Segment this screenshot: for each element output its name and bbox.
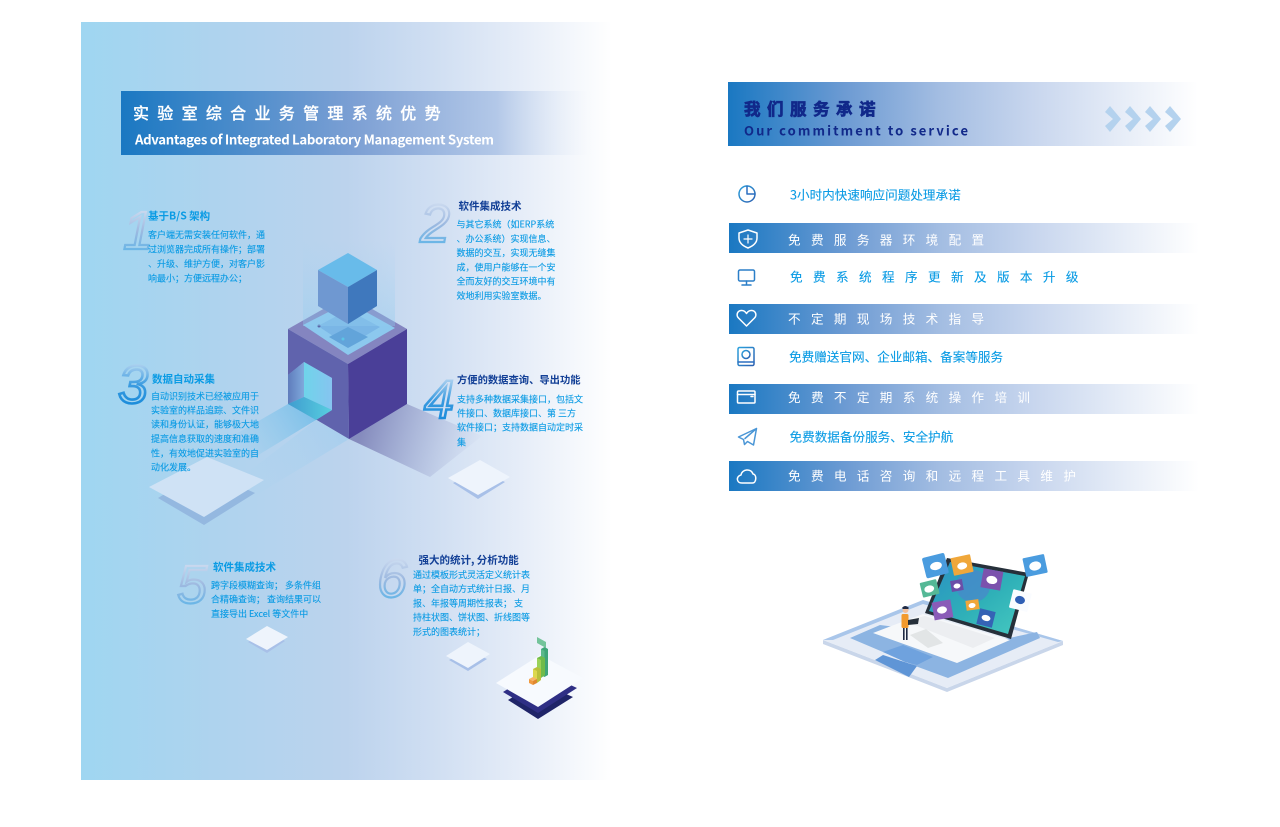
row: response commitment: 3小时内快速响应问题处理承诺 <box>790 184 961 204</box>
feature 4: 方便的数据查询、导出功能 <box>457 372 581 386</box>
platform: left large <box>149 457 264 525</box>
feature 1: 过浏览器完成所有操作；部署 <box>148 242 265 256</box>
feature 4: 软件接口；支持数据自动定时采 <box>457 420 583 434</box>
feature 1: 1 <box>123 201 153 261</box>
icon: clock <box>739 186 755 202</box>
feature 5: 合精确查询； 查询结果可以 <box>211 592 321 606</box>
commitment heading banner: Our commitment to service <box>744 120 968 140</box>
cloud app tiles <box>920 553 1048 628</box>
feature 3: 数据自动采集 <box>152 372 215 386</box>
feature 3: 自动识别技术已经被应用于 <box>151 390 259 402</box>
row: on-site guidance <box>729 304 1199 334</box>
isometric base <box>823 600 1063 692</box>
feature 1 <box>123 201 265 284</box>
commitment heading banner <box>728 82 1198 146</box>
icon: book <box>738 348 754 366</box>
platform: feature 6 <box>446 642 490 671</box>
feature 2: 与其它系统（如ERP系统 <box>456 218 554 230</box>
feature 3: 3 <box>118 355 148 415</box>
feature 1: 响最小；方便远程办公； <box>148 272 247 284</box>
feature 3: 动化发展。 <box>151 460 196 474</box>
feature 5 <box>177 555 321 620</box>
feature 6: 报、年报等周期性报表； 支 <box>413 596 523 610</box>
feature 2: 成，使用户能够在一个安 <box>456 260 556 274</box>
feature 2: 全而友好的交互环境中有 <box>456 274 556 288</box>
row: server environment <box>729 223 1199 253</box>
feature 2: 数据的交互，实现无缝集 <box>456 246 556 259</box>
floating cube <box>318 253 377 324</box>
laptop illustration <box>823 553 1063 692</box>
feature 4: 集 <box>457 436 466 448</box>
feature 3: 读和身份认证，能够极大地 <box>151 418 259 430</box>
feature 4 <box>424 370 583 448</box>
icon: bar chart on stacked platform <box>496 637 583 719</box>
feature 5: 软件集成技术 <box>213 560 276 574</box>
panel: system advantages <box>81 22 612 780</box>
feature 2: 2 <box>419 194 450 254</box>
feature 6: 单；全自动方式统计日报、月 <box>413 582 530 595</box>
feature 3: 提高信息获取的速度和准确 <box>151 432 259 445</box>
feature 3 <box>118 355 259 474</box>
feature 4: 件接口、数据库接口、第 三方 <box>457 406 576 420</box>
panel heading banner <box>121 91 591 155</box>
row: system training <box>729 384 1199 414</box>
feature 2 <box>419 194 556 302</box>
feature 6: 强大的统计, 分析功能 <box>418 552 519 568</box>
cube window <box>288 362 332 420</box>
icon: card <box>738 391 755 403</box>
row: on-site guidance: 不定期现场技术指导 <box>788 308 994 328</box>
feature 2: 、办公系统）实现信息、 <box>456 232 556 245</box>
feature 2: 效地利用实验室数据。 <box>456 289 547 302</box>
icon: heart <box>737 310 756 326</box>
row: phone consultation <box>729 461 1199 491</box>
isometric cube illustration <box>288 240 407 439</box>
commitment heading banner: 我们服务承诺 <box>744 96 882 120</box>
icon: shield <box>739 230 757 248</box>
feature 5: 5 <box>177 555 208 615</box>
person <box>902 606 919 640</box>
platform: right <box>448 460 510 499</box>
row: server environment: 免费服务器环境配置 <box>788 230 994 248</box>
platform: feature 5 <box>246 626 288 653</box>
icon: cloud <box>737 470 756 483</box>
row: free website: 免费赠送官网、企业邮箱、备案等服务 <box>789 346 1004 366</box>
icon: paper plane <box>738 428 756 445</box>
laptop body <box>873 558 1029 663</box>
feature 2: 软件集成技术 <box>458 198 522 214</box>
feature 1: 基于B/S 架构 <box>148 208 210 224</box>
feature 3: 性，有效地促进实验室的自 <box>151 446 259 460</box>
feature 5: 直接导出 Excel 等文件中 <box>211 607 308 620</box>
feature 5: 跨字段模糊查询； 多条件组 <box>211 578 321 592</box>
panel heading banner: 实验室综合业务管理系统优势 <box>133 100 449 124</box>
panel: service commitment <box>728 82 1199 692</box>
feature 3: 实验室的样品追踪、文件识 <box>151 404 259 416</box>
feature 1: 、升级、维护方便，对客户影 <box>148 257 265 270</box>
feature 6: 持柱状图、饼状图、折线图等 <box>413 610 530 624</box>
row: data backup: 免费数据备份服务、安全护航 <box>790 426 954 446</box>
feature 1: 客户端无需安装任何软件，通 <box>148 228 265 241</box>
icon: monitor <box>738 270 754 285</box>
feature 6: 6 <box>377 549 408 609</box>
icon: chevrons <box>1105 106 1181 132</box>
feature 4: 4 <box>424 370 454 430</box>
feature 6: 通过模板形式灵活定义统计表 <box>413 568 530 581</box>
feature 4: 支持多种数据采集接口，包括文 <box>457 392 583 406</box>
panel heading banner: Advantages of Integrated Laboratory Management System <box>134 130 494 148</box>
row: phone consultation: 免费电话咨询和远程工具维护 <box>788 466 1086 484</box>
row: system training: 免费不定期系统操作培训 <box>788 387 1040 406</box>
light beams and floor shadows <box>222 404 482 497</box>
feature 6: 形式的图表统计； <box>413 625 485 638</box>
row: system upgrades: 免费系统程序更新及版本升级 <box>790 266 1089 286</box>
feature 6 <box>377 549 530 638</box>
